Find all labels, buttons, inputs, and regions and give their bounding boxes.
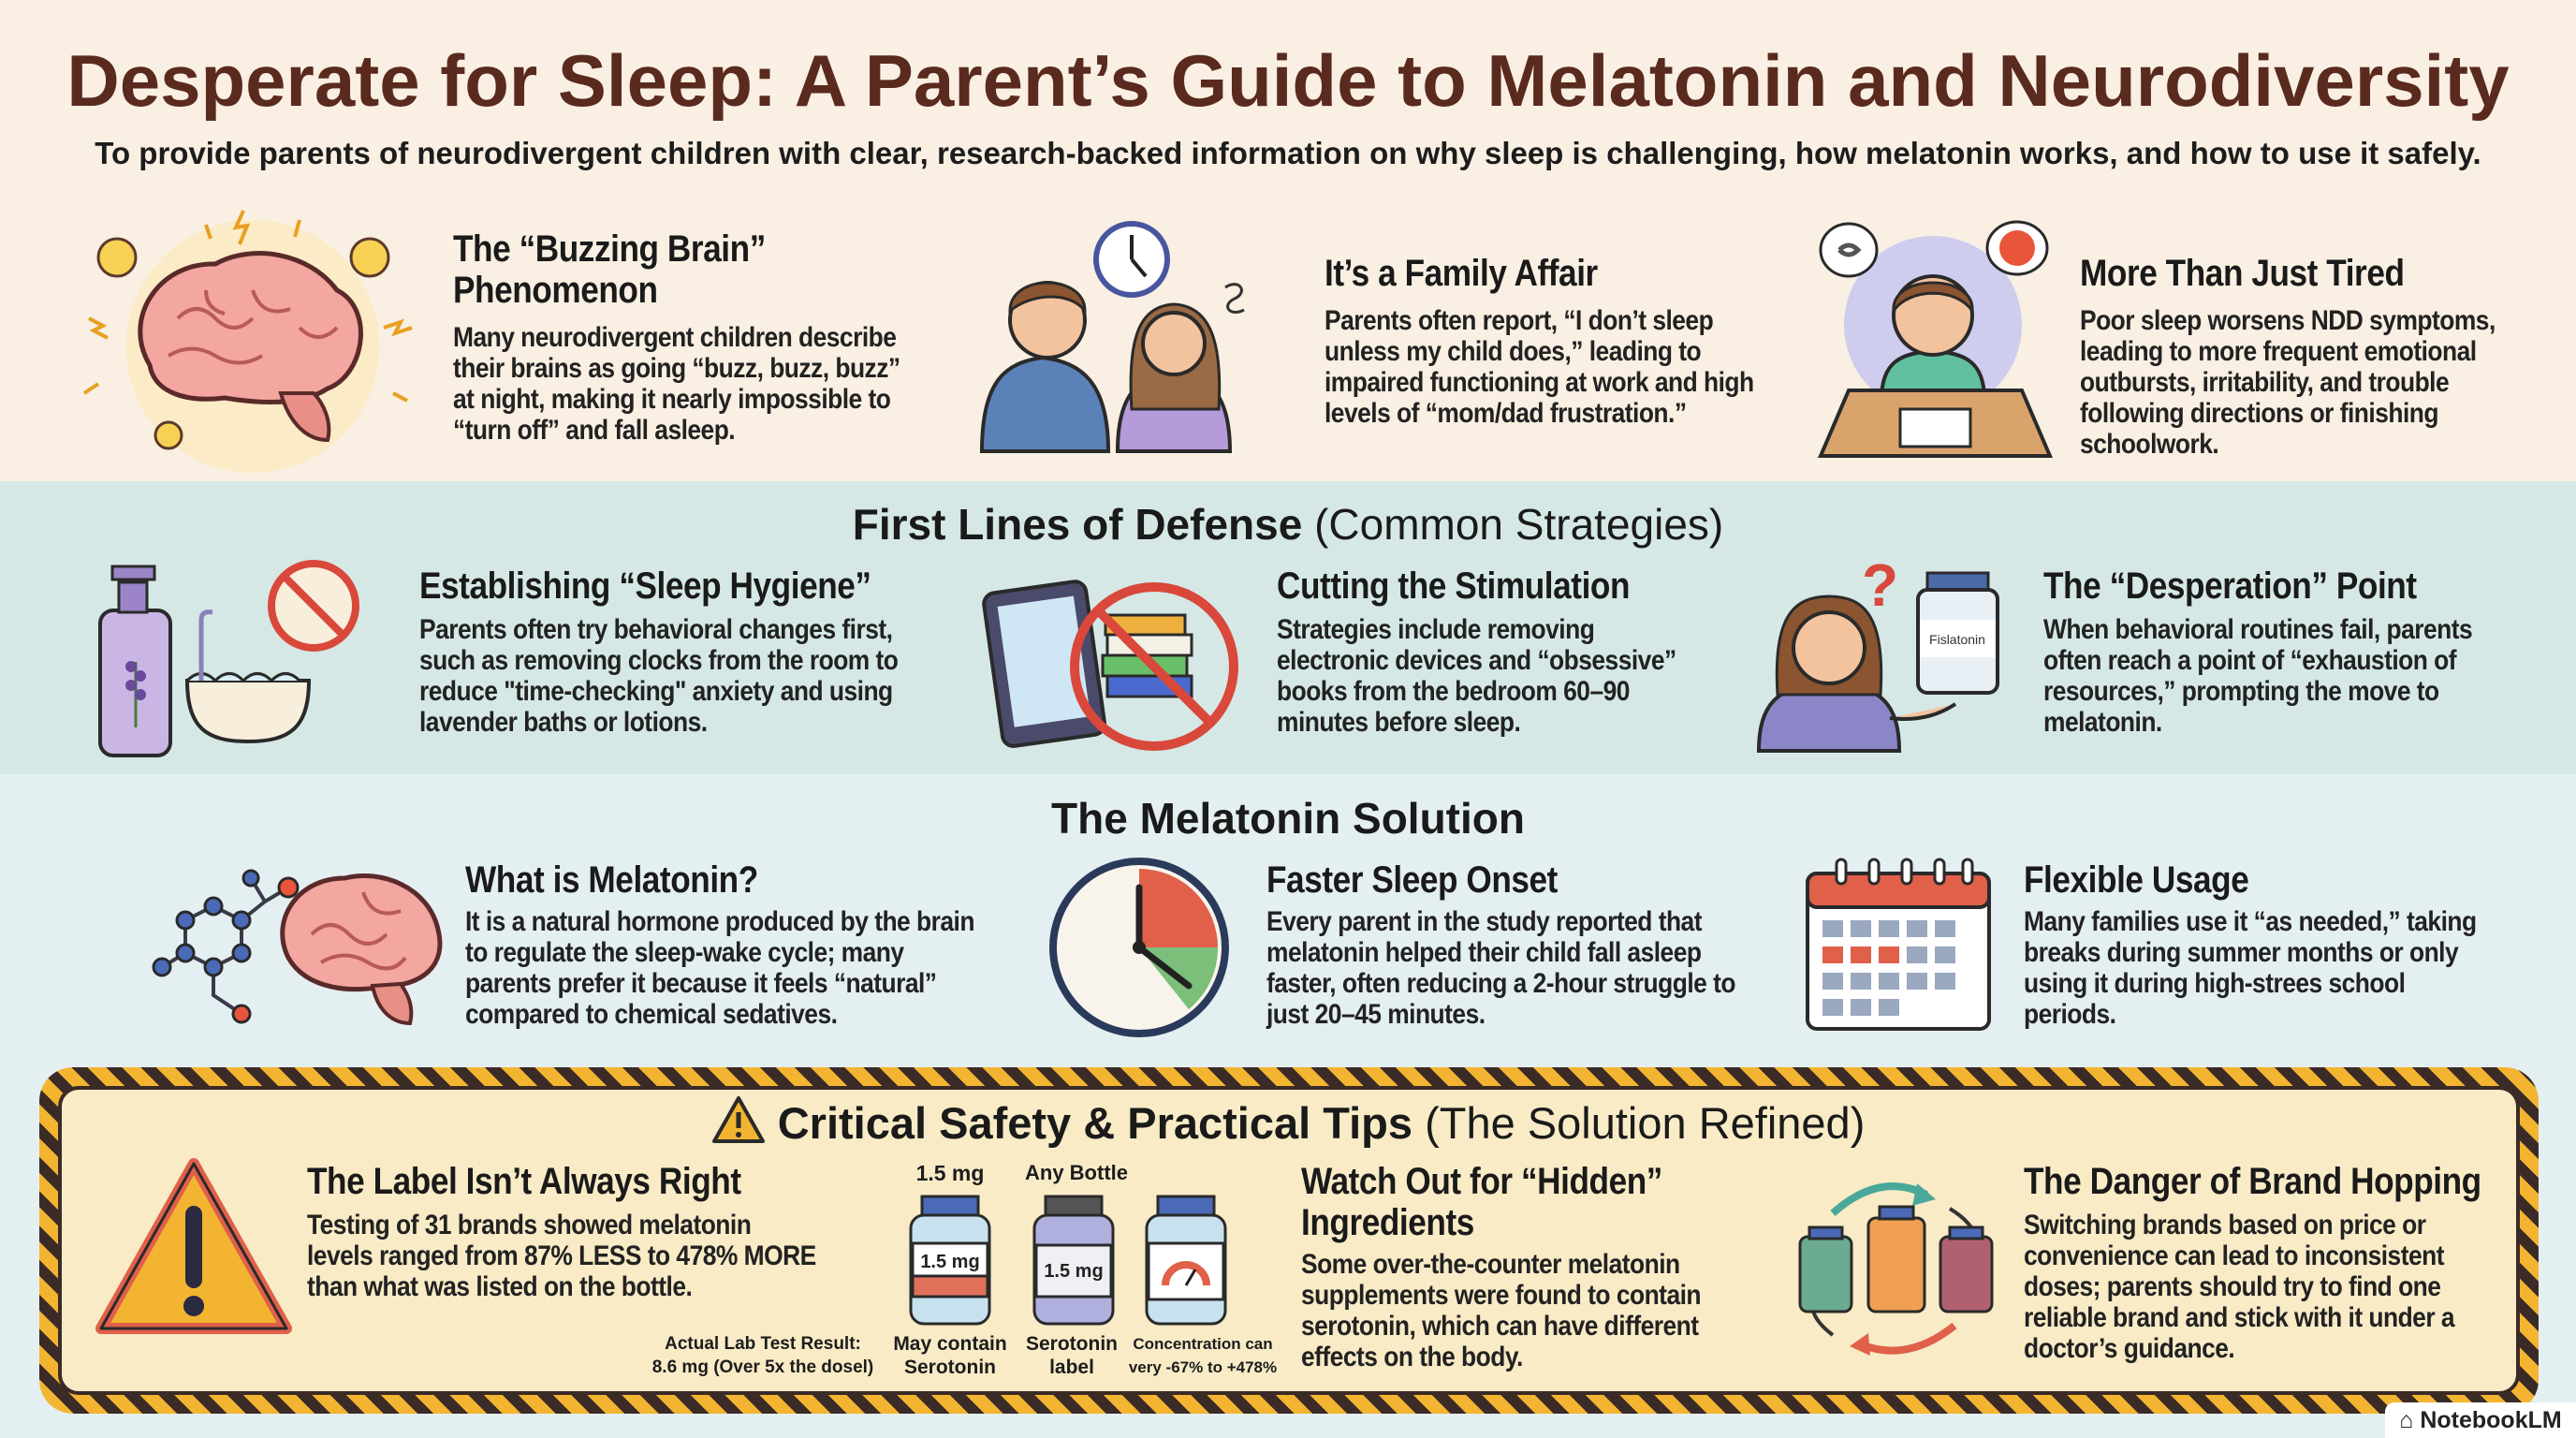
text: more than just tired: Poor sleep worsens NDD symptoms, leading to more frequent emotional outbursts, irritability, and trouble following directions or finishing schoolwork. — [2080, 305, 2496, 460]
text: sleep hygiene: Parents often try behavioral changes first, such as removing clocks from the room to reduce "time-checking" anxiety and using lavender baths or lotions. — [419, 614, 898, 738]
icon: exhausted mother with melatonin bottle: Fislatonin — [1929, 632, 1985, 647]
band: melatonin solution blue — [0, 774, 2576, 1438]
text: buzzing brain: Many neurodivergent children describe their brains as going “buzz, buzz, buzz” at night, making it nearly impossible to “turn off” and fall asleep. — [453, 322, 900, 446]
caption: concentration: very -67% to +478% — [1129, 1358, 1277, 1376]
caption: serotonin label — [1026, 1333, 1118, 1378]
text: flexible usage: Flexible Usage — [2024, 859, 2248, 901]
text: hidden ingredients: Watch Out for “Hidden” — [1301, 1161, 1662, 1202]
caption: actual lab test: 8.6 mg (Over 5x the dosel) — [652, 1357, 873, 1377]
caption: may contain serotonin: Serotonin — [904, 1357, 996, 1378]
chart: bottles comparison: 1.5 mg — [1044, 1261, 1104, 1282]
band: top cream background — [0, 0, 2576, 481]
heading: first lines of defense: First Lines of Defense (Common Strategies) — [853, 500, 1723, 549]
text: faster sleep onset: Every parent in the study reported that melatonin helped their child fall asleep faster, often reducing a 2-hour struggle to just 20–45 minutes. — [1266, 906, 1735, 1030]
chart: bottles comparison — [652, 1161, 1277, 1378]
text: what is melatonin: It is a natural hormone produced by the brain to regulate the sleep-wake cycle; many parents prefer it because it feels “natural” compared to chemical sedatives. — [465, 906, 974, 1030]
text: cutting the stimulation: Strategies include removing electronic devices and “obsessive” books from the bedroom 60–90 minutes before sleep. — [1277, 614, 1676, 738]
text: label isn't always right: levels ranged from 87% LESS to 478% MORE than what was listed on the bottle. — [307, 1240, 816, 1302]
icon: buzzing brain with light bulbs — [82, 210, 413, 473]
text: hidden ingredients: Ingredients — [1301, 1202, 1474, 1243]
icon: big warning triangle — [95, 1158, 292, 1334]
text: buzzing brain: Phenomenon — [453, 270, 658, 311]
caption: serotonin label: label — [1049, 1357, 1094, 1378]
caption: may contain serotonin: May contain — [893, 1333, 1007, 1355]
heading: critical safety: Critical Safety & Practical Tips (The Solution Refined) — [778, 1098, 1865, 1148]
caption: actual lab test — [652, 1334, 873, 1377]
icon: lotion, bath and no-clock — [98, 560, 359, 757]
text: faster sleep onset: Faster Sleep Onset — [1266, 859, 1558, 901]
icon: frustrated child at desk — [1818, 221, 2053, 458]
caption: actual lab test: Actual Lab Test Result: — [665, 1334, 861, 1354]
text: label isn't always right — [307, 1161, 816, 1302]
icon: exhausted mother with melatonin bottle — [1757, 551, 1999, 753]
text: label isn't always right: The Label Isn’t Always Right — [307, 1161, 741, 1202]
text: hidden ingredients — [1301, 1161, 1701, 1372]
badge: NotebookLM: ⌂ NotebookLM — [2399, 1407, 2562, 1433]
icon: brand hopping cycle — [1799, 1182, 1994, 1356]
text: brand hopping: Switching brands based on price or convenience can lead to inconsistent doses; parents should try to find one reliable brand and stick with it under a doctor’s guidance. — [2024, 1210, 2454, 1364]
title: Desperate for Sleep: A Parent’s Guide to Melatonin and Neurodiversity — [66, 39, 2510, 122]
chart: bottles comparison: 1.5 mg — [920, 1252, 980, 1272]
caption: serotonin label: Serotonin — [1026, 1333, 1118, 1355]
icon: tablet and books crossed out — [982, 580, 1238, 751]
text: flexible usage: Many families use it “as needed,” taking breaks during summer months or only using it during high-strees school periods. — [2024, 906, 2477, 1030]
text: desperation point: The “Desperation” Point — [2043, 565, 2417, 607]
text: cutting the stimulation: Cutting the Stimulation — [1277, 565, 1630, 607]
text: more than just tired: More Than Just Tired — [2080, 253, 2405, 294]
text: sleep hygiene: Establishing “Sleep Hygiene” — [419, 565, 871, 607]
caption: concentration — [1129, 1335, 1277, 1376]
text: label isn't always right: Testing of 31 brands showed melatonin — [307, 1210, 751, 1240]
subtitle: To provide parents of neurodivergent children with clear, research-backed information on why sleep is challenging, how melatonin works, and how to use it safely. — [95, 136, 2481, 170]
text: family affair: Parents often report, “I don’t sleep unless my child does,” leading to impaired functioning at work and high levels of “mom/dad frustration.” — [1325, 305, 1754, 429]
heading: the melatonin solution: The Melatonin Solution — [1051, 794, 1525, 843]
caption: concentration: Concentration can — [1133, 1335, 1273, 1353]
icon: tired parents with clock — [980, 221, 1245, 453]
bottle labels: 1.5 mg — [916, 1161, 984, 1185]
band: first lines of defense teal — [0, 481, 2576, 774]
icon: exhausted mother with melatonin bottle: ? — [1862, 551, 1898, 619]
icon: calendar — [1806, 858, 1991, 1031]
text: family affair: It’s a Family Affair — [1325, 253, 1598, 294]
chart: bottles comparison: Any Bottle — [1025, 1161, 1128, 1184]
text: buzzing brain: The “Buzzing Brain” — [453, 228, 766, 270]
text: brand hopping: The Danger of Brand Hopping — [2024, 1161, 2481, 1202]
text: buzzing brain — [453, 228, 900, 446]
text: what is melatonin: What is Melatonin? — [465, 859, 758, 901]
text: hidden ingredients: Some over-the-counter melatonin supplements were found to contain serotonin, which can have different effects on the body. — [1301, 1249, 1701, 1372]
badge: NotebookLM — [2385, 1402, 2576, 1438]
caption: may contain serotonin — [893, 1333, 1007, 1378]
text: desperation point: When behavioral routines fail, parents often reach a point of “exhaustion of resources,” prompting the move to melatonin. — [2043, 614, 2472, 738]
panel: critical safety & practical tips — [39, 1067, 2539, 1414]
icon: molecule and brain — [152, 869, 442, 1025]
icon: clock with shortened time — [1049, 858, 1229, 1037]
